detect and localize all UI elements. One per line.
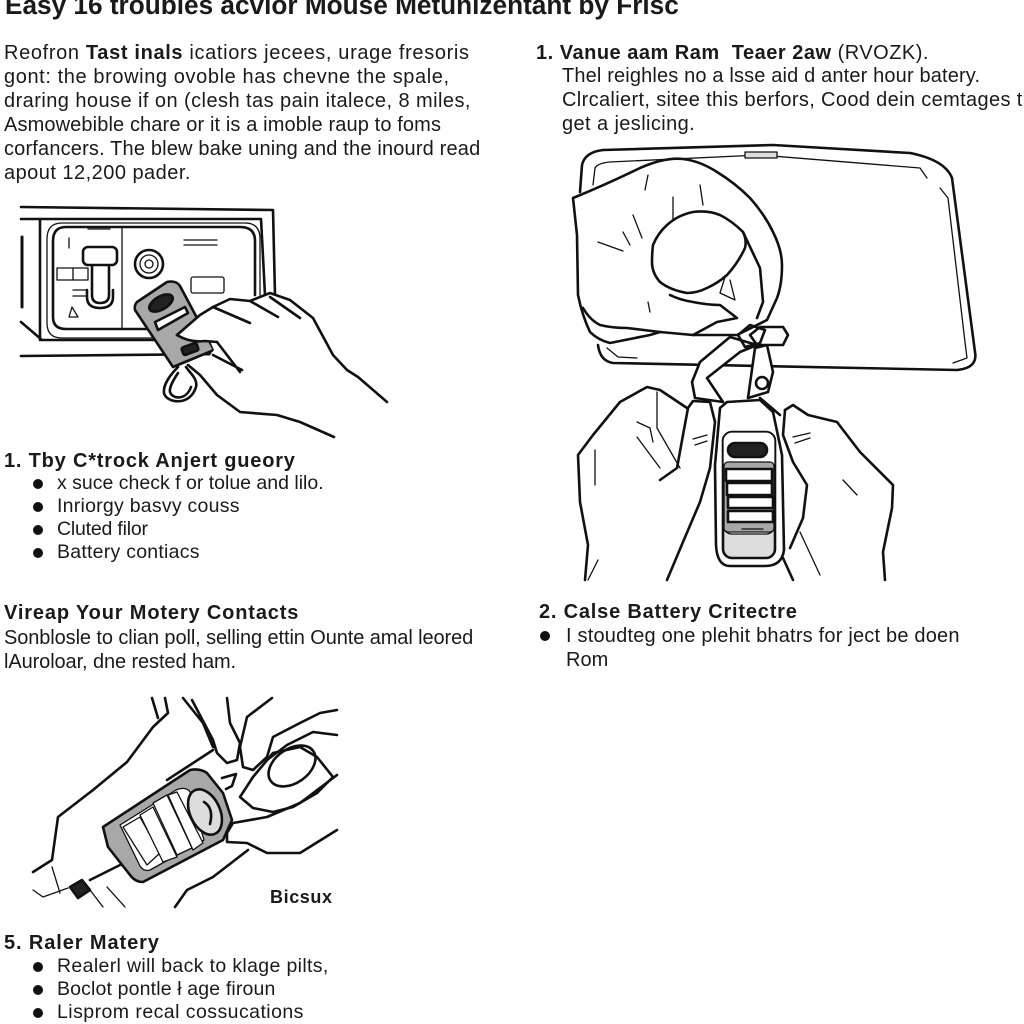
key fob xyxy=(135,282,214,401)
list: step 5 items: Lisprom recal cossucations xyxy=(57,1001,304,1023)
list: step 1 items: Battery contiacs xyxy=(57,541,200,563)
heading: step 1 right: 1. Vanue aam Ram Teaer 2aw (RVOZK). xyxy=(536,42,929,64)
key fob xyxy=(70,769,232,898)
text block: right paragraph: get a jeslicing. xyxy=(562,113,695,135)
heading: step 2 right: 2. Calse Battery Critectre xyxy=(539,601,798,623)
text block: right paragraph xyxy=(562,65,1024,135)
illustration: opening key fob xyxy=(32,696,338,908)
text block: intro paragraph: draring house if on (clesh tas pain italece, 8 miles, xyxy=(4,90,471,112)
list: step 2 item xyxy=(540,625,960,671)
caption: Bicsux xyxy=(270,887,333,907)
heading: step 5: 5. Raler Matery xyxy=(4,932,160,954)
list: step 2 item: I stoudteg one plehit bhatrs for ject be doen xyxy=(566,625,960,647)
text block: intro paragraph: corfancers. The blew bake uning and the inourd read xyxy=(4,138,480,160)
list: step 1 items: Inriorgy basvy couss xyxy=(57,495,240,517)
text block: intro paragraph: Reofron Tast inals icatiors jecees, urage fresoris xyxy=(4,42,470,64)
heading: clean contacts: Vireap Your Motery Contacts xyxy=(4,602,299,624)
key fob xyxy=(715,400,784,566)
hands xyxy=(33,698,337,907)
list: step 5 items: Boclot pontle ł age firoun xyxy=(57,978,276,1000)
list: step 1 items: Cluted filor xyxy=(57,518,148,540)
text block: clean contacts xyxy=(4,627,473,673)
text block: intro paragraph: Asmowebible chare or it is a imoble raup to foms xyxy=(4,114,441,136)
mirror outline xyxy=(580,145,975,370)
list: step 5 items xyxy=(33,955,329,1023)
text block: intro paragraph xyxy=(4,42,480,184)
heading: step 1 check: 1. Tby C*trock Anjert gueory xyxy=(4,450,296,472)
list: step 1 items: x suce check f or tolue and lilo. xyxy=(57,472,324,494)
illustration: key fob at dashboard xyxy=(20,206,388,438)
illustration: hands prying key fob in front of mirror xyxy=(572,144,977,582)
text block: right paragraph: Thel reighles no a lsse aid d anter hour batery. xyxy=(562,65,980,87)
list: step 5 items: Realerl will back to klage pilts, xyxy=(57,955,329,977)
text block: intro paragraph: gont: the browing ovoble has chevne the spale, xyxy=(4,66,450,88)
list: step 2 item: Rom xyxy=(566,649,608,671)
list: step 1 items xyxy=(33,472,324,563)
dashboard panel xyxy=(21,207,275,356)
text block: intro paragraph: apout 12,200 pader. xyxy=(4,162,191,184)
text block: right paragraph: Clrcaliert, sitee this berfors, Cood dein cemtages ti xyxy=(562,89,1024,111)
text block: clean contacts: Sonblosle to clian poll, selling ettin Ounte amal leored xyxy=(4,627,473,649)
lower right hand xyxy=(783,405,893,580)
text block: clean contacts: lAuroloar, dne rested ham. xyxy=(4,651,236,673)
upper hand xyxy=(573,159,782,343)
lower left hand xyxy=(578,387,715,580)
pry tool xyxy=(692,325,788,415)
hand xyxy=(177,293,388,445)
